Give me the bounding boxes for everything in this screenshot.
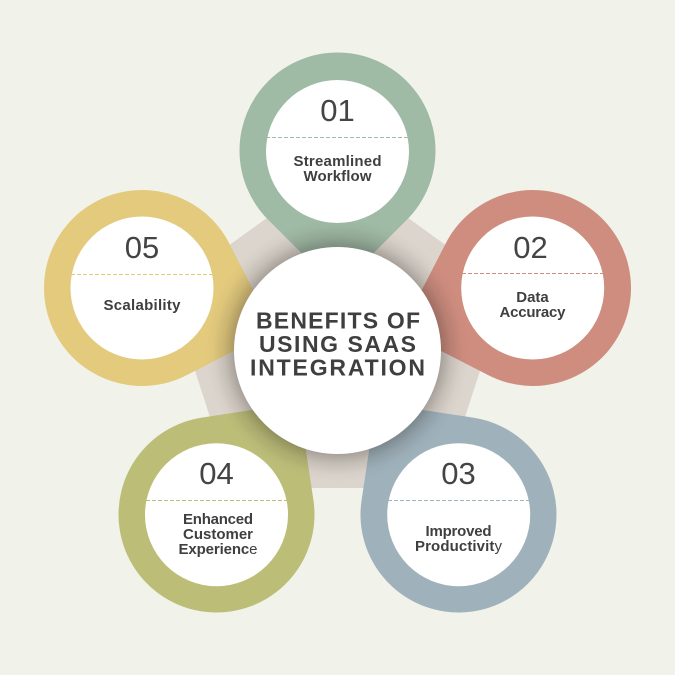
card 01: Streamlined	[294, 153, 382, 170]
card 03	[387, 443, 530, 586]
card 05: 05	[125, 230, 159, 265]
card 03: Productivity	[415, 538, 502, 555]
card 05	[70, 216, 214, 360]
title: USING SAAS	[259, 331, 416, 357]
card 03: 03	[441, 456, 476, 491]
center circle shadow	[206, 218, 470, 482]
petal 01: Streamlined Workflow (green)	[240, 53, 436, 289]
card 04: Customer	[183, 526, 253, 543]
title	[250, 308, 425, 380]
title: BENEFITS OF	[256, 308, 420, 334]
card 02: 02	[513, 230, 548, 265]
card 01	[266, 80, 409, 223]
petal 05: Scalability (yellow)	[19, 165, 304, 424]
petal 03: Improved Productivity (blue)	[297, 345, 596, 652]
center circle	[234, 247, 441, 454]
card 01: Workflow	[304, 168, 372, 185]
petal 02: Data Accuracy (red)	[371, 165, 656, 424]
card 04: 04	[199, 456, 234, 491]
card 05: Scalability	[104, 297, 181, 314]
card 04	[145, 443, 288, 586]
card 01: 01	[320, 93, 355, 128]
card 02: Accuracy	[500, 304, 566, 321]
card 02: Data	[516, 289, 549, 306]
background pentagon	[168, 167, 507, 488]
card 02	[461, 216, 604, 360]
petal 04: Enhanced Customer Experience (olive)	[79, 345, 378, 652]
card 04: Experience	[178, 541, 258, 558]
title: INTEGRATION	[250, 354, 425, 380]
card 04: Enhanced	[183, 511, 253, 528]
card 03: Improved	[426, 523, 492, 540]
